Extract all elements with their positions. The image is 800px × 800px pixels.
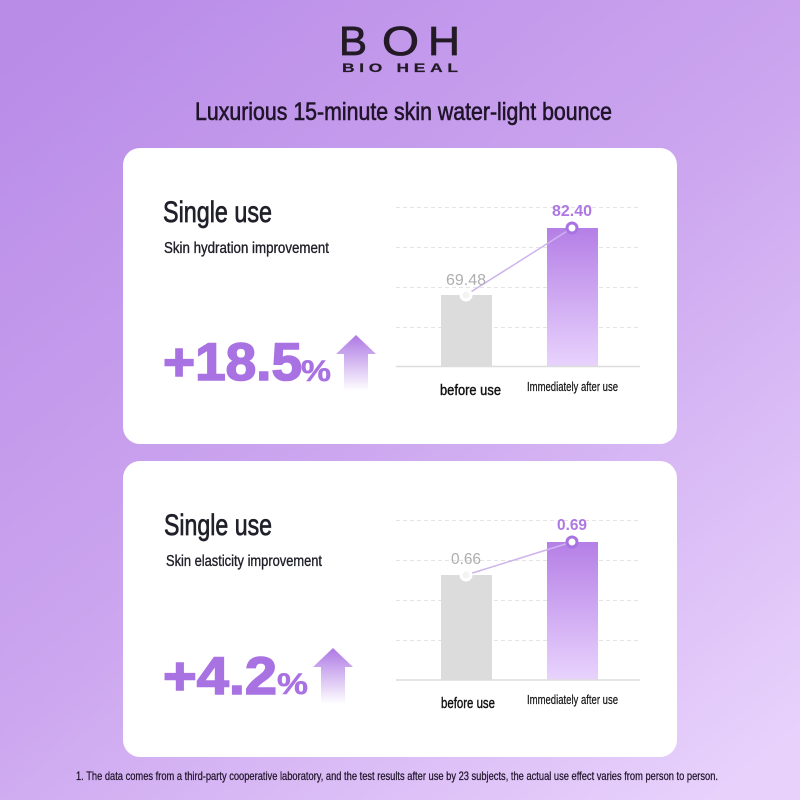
- value: 69.48: 69.48: [446, 272, 486, 289]
- label: immediately after use: Immediately after use: [527, 692, 618, 707]
- icon: up arrow: [313, 648, 353, 707]
- stat: +4.2%: %: [277, 668, 308, 701]
- logo: BOH Bio Heal: BIO HEAL: [342, 62, 458, 75]
- subheading: skin hydration improvement: Skin hydration improvement: [164, 240, 330, 257]
- icon: up arrow: [336, 335, 376, 394]
- logo: BOH Bio Heal: O: [382, 18, 419, 64]
- logo: BOH Bio Heal: B: [339, 18, 367, 64]
- heading: single use: Single use: [163, 196, 272, 229]
- value: 0.69: 0.69: [557, 517, 587, 534]
- panel: skin elasticity: [123, 461, 677, 757]
- bar chart: hydration: [396, 203, 640, 399]
- trend line: [466, 228, 572, 295]
- logo: BOH Bio Heal: [339, 18, 460, 75]
- logo: BOH Bio Heal: H: [428, 18, 460, 64]
- value: 0.66: 0.66: [451, 551, 481, 568]
- stat: +4.2%: +4.2: [163, 647, 277, 706]
- bar: immediately after use: [547, 542, 598, 680]
- label: before use: before use: [440, 383, 501, 399]
- label: immediately after use: Immediately after use: [527, 379, 618, 394]
- value: 82.40: 82.40: [552, 203, 592, 220]
- panel: skin hydration: [123, 148, 677, 444]
- label: before use: before use: [441, 696, 495, 712]
- subheading: skin elasticity improvement: Skin elasticity improvement: [166, 553, 323, 570]
- bar: before use: [441, 295, 492, 367]
- stat: +18.5%: %: [301, 355, 331, 388]
- trend line: [466, 542, 572, 575]
- bar: immediately after use: [547, 228, 598, 367]
- title: Luxurious 15-minute skin water-light bounce: [195, 98, 612, 126]
- bar chart: elasticity: [396, 517, 640, 712]
- stat: +18.5%: +18.5: [163, 333, 302, 392]
- bar: before use: [441, 575, 492, 680]
- heading: single use: Single use: [164, 509, 272, 542]
